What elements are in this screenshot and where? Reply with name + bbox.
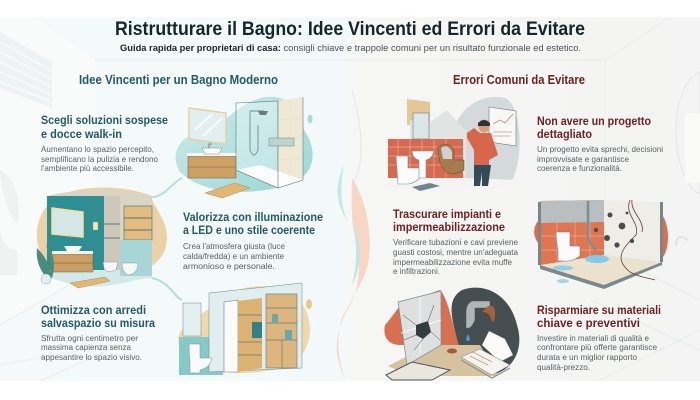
card: materiali text [537,304,661,372]
illustration: damaged plumbing [534,200,668,289]
card: LED text: a LED e uno stile coerente [183,224,315,237]
card: progetto text: coerenza e funzionalità. [537,164,622,173]
card: materiali text: qualità-prezzo. [537,363,590,372]
card: salvaspazio text: Ottimizza con arredi [41,304,146,317]
card: materiali text: durata e un miglior rapporto [537,353,638,362]
card: progetto text: Non avere un progetto [537,115,651,128]
card: materiali text: confrontare più offerte garantisce [537,343,658,352]
card: impianti text [393,208,519,276]
card: impianti text: guasti costosi, mentre un'adeguata [393,248,519,257]
card: impianti text: impermeabilizzazione [393,221,506,234]
card: sospese text: l'ambiente più accessibile. [41,164,134,173]
card: LED text: Valorizza con illuminazione [183,211,324,224]
title: Ristrutturare il Bagno: Idee Vincenti ed Errori da Evitare [115,19,585,40]
card: salvaspazio text: appesantire lo spazio visivo. [41,353,142,362]
section heading: errors: Errori Comuni da Evitare [453,73,585,87]
card: sospese text: e docce walk-in [41,128,122,141]
illustration: custom storage [178,283,312,375]
card: LED text: calda/fredda) e un ambiente [183,252,285,261]
illustration: cheap materials [384,288,519,380]
card: sospese text: Aumentano lo spazio percepito, [41,145,154,154]
card: progetto text: Un progetto evita sprechi, decisioni [537,145,663,154]
card: impianti text: Trascurare impianti e [393,208,502,221]
central divider curves [337,90,370,378]
card: impianti text: impermeabilizzazione evita muffe [393,258,513,267]
card: sospese text: Scegli soluzioni sospese [41,114,169,127]
card: LED text: armonioso e personale. [183,262,275,271]
card: LED text [183,211,324,271]
subtitle: Guida rapida per proprietari di casa: consigli chiave e trappole comuni per un risultato funzionale ed estetico. [120,42,581,53]
illustration: LED bathroom [37,188,182,300]
illustration: walk-in shower [150,97,313,198]
card: salvaspazio text: massima capienza senza [41,343,132,352]
card: sospese text [41,114,169,173]
card: salvaspazio text: salvaspazio su misura [41,317,156,330]
illustration: no project [385,97,520,192]
card: impianti text: Verificare tubazioni e cavi previene [393,238,519,247]
card: sospese text: semplificano la pulizia e rendono [41,155,159,164]
card: LED text: Crea l'atmosfera giusta (luce [183,242,286,251]
section heading: ideas: Idee Vincenti per un Bagno Moderno [79,73,278,87]
card: progetto text: dettagliato [537,128,592,141]
card: impianti text: e infiltrazioni. [393,267,440,276]
card: progetto text [537,115,663,173]
card: materiali text: chiave e preventivi [537,317,640,330]
card: materiali text: Investire in materiali di qualità e [537,334,650,343]
card: salvaspazio text [41,304,156,362]
card: progetto text: improvvisate e garantisce [537,155,630,164]
card: materiali text: Risparmiare su materiali [537,304,661,317]
card: salvaspazio text: Sfrutta ogni centimetro per [41,334,138,343]
